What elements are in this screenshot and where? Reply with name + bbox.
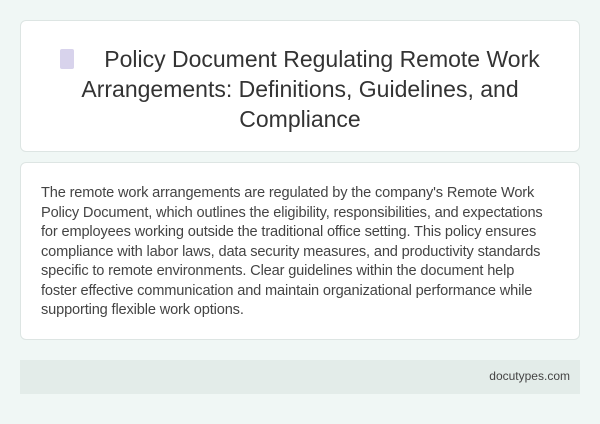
description text: compliance with labor laws, data security measures, and productivity standards (41, 244, 540, 260)
description text: The remote work arrangements are regulated by the company's Remote Work (41, 185, 534, 201)
title card (20, 20, 580, 152)
icon: document (60, 49, 74, 69)
description text: supporting flexible work options. (41, 302, 244, 318)
description text: specific to remote environments. Clear guidelines within the document help (41, 263, 514, 279)
description card (20, 162, 580, 340)
footer (20, 360, 580, 394)
description text: foster effective communication and maintain organizational performance while (41, 282, 532, 298)
description text: for employees working outside the traditional office setting. This policy ensures (41, 224, 536, 240)
description text (41, 185, 543, 318)
title: Policy Document Regulating Remote Work Arrangements: Definitions, Guidelines, and Compliance (81, 46, 540, 132)
description text: Policy Document, which outlines the eligibility, responsibilities, and expectations (41, 204, 543, 220)
footer text: docutypes.com (489, 369, 570, 383)
